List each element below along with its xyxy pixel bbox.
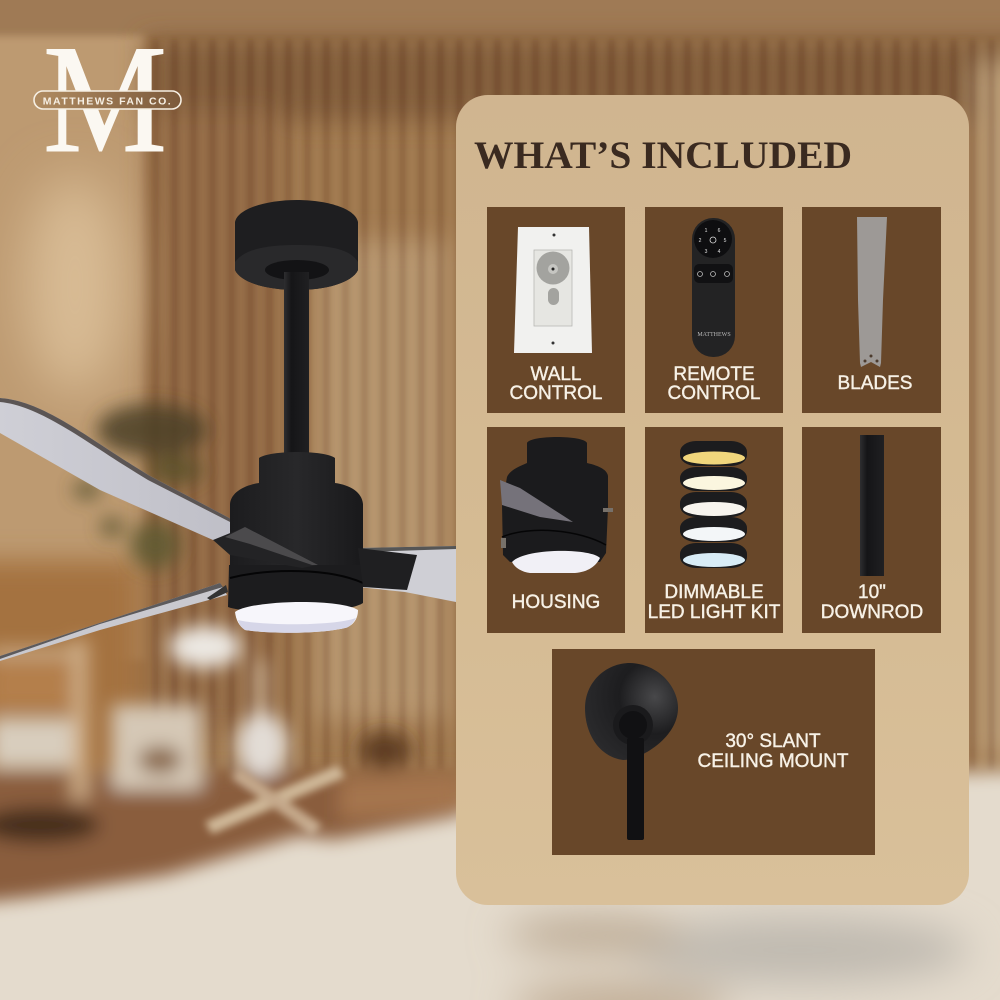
icon: housing: [500, 437, 613, 573]
label: CEILING MOUNT: [698, 751, 849, 772]
icon: slant ceiling mount: [585, 663, 678, 840]
fan blade: upper left: [0, 398, 318, 565]
downrod: [284, 272, 309, 454]
icon: remote control: 5: [724, 238, 727, 244]
label: HOUSING: [512, 592, 600, 613]
motor housing: [228, 452, 363, 613]
logo: Matthews Fan Co.: M: [43, 13, 167, 185]
fan blade: lower left: [0, 583, 227, 661]
card: blades: [802, 207, 941, 413]
label: CONTROL: [668, 383, 760, 404]
icon: remote control: MATTHEWS: [697, 332, 731, 338]
label: LED LIGHT KIT: [648, 602, 781, 623]
card: housing: [487, 427, 625, 633]
logo: Matthews Fan Co.: MATTHEWS FAN CO.: [43, 96, 172, 108]
icon: remote control: 3: [705, 249, 708, 255]
icon: wall control: [514, 227, 592, 353]
icon: remote control: 2: [699, 238, 702, 244]
label: CONTROL: [510, 383, 602, 404]
label: 30° SLANT: [725, 731, 821, 752]
card: dimmable LED light kit: [645, 427, 783, 633]
label: DOWNROD: [821, 602, 923, 623]
blade brackets: [207, 527, 417, 600]
card: 10 inch downrod: [802, 427, 941, 633]
card: 30 degree slant ceiling mount: [552, 649, 875, 855]
icon: remote control: 1: [705, 228, 708, 234]
icon: remote control: 6: [718, 228, 721, 234]
label: DIMMABLE: [664, 582, 764, 603]
LED light: [235, 602, 358, 633]
plant: [73, 404, 207, 569]
icon: blade: [857, 217, 887, 367]
hanging canopy: [235, 200, 358, 290]
icon: remote control: [692, 218, 735, 357]
label: BLADES: [838, 373, 912, 394]
panel: what's included: [456, 95, 969, 905]
label: REMOTE: [673, 364, 755, 385]
fan blade: right: [358, 546, 456, 602]
label: WALL: [530, 364, 582, 385]
ceiling fan product: [0, 200, 456, 661]
card: wall control: [487, 207, 625, 413]
label: 10": [858, 582, 886, 603]
heading: WHAT’S INCLUDED: [474, 134, 852, 177]
rug and furniture: [0, 626, 460, 915]
card: remote control: [645, 207, 783, 413]
icon: LED light stack: [680, 441, 747, 568]
icon: remote control: 4: [718, 249, 721, 255]
icon: downrod: [860, 435, 884, 576]
floor: [0, 770, 1000, 1000]
